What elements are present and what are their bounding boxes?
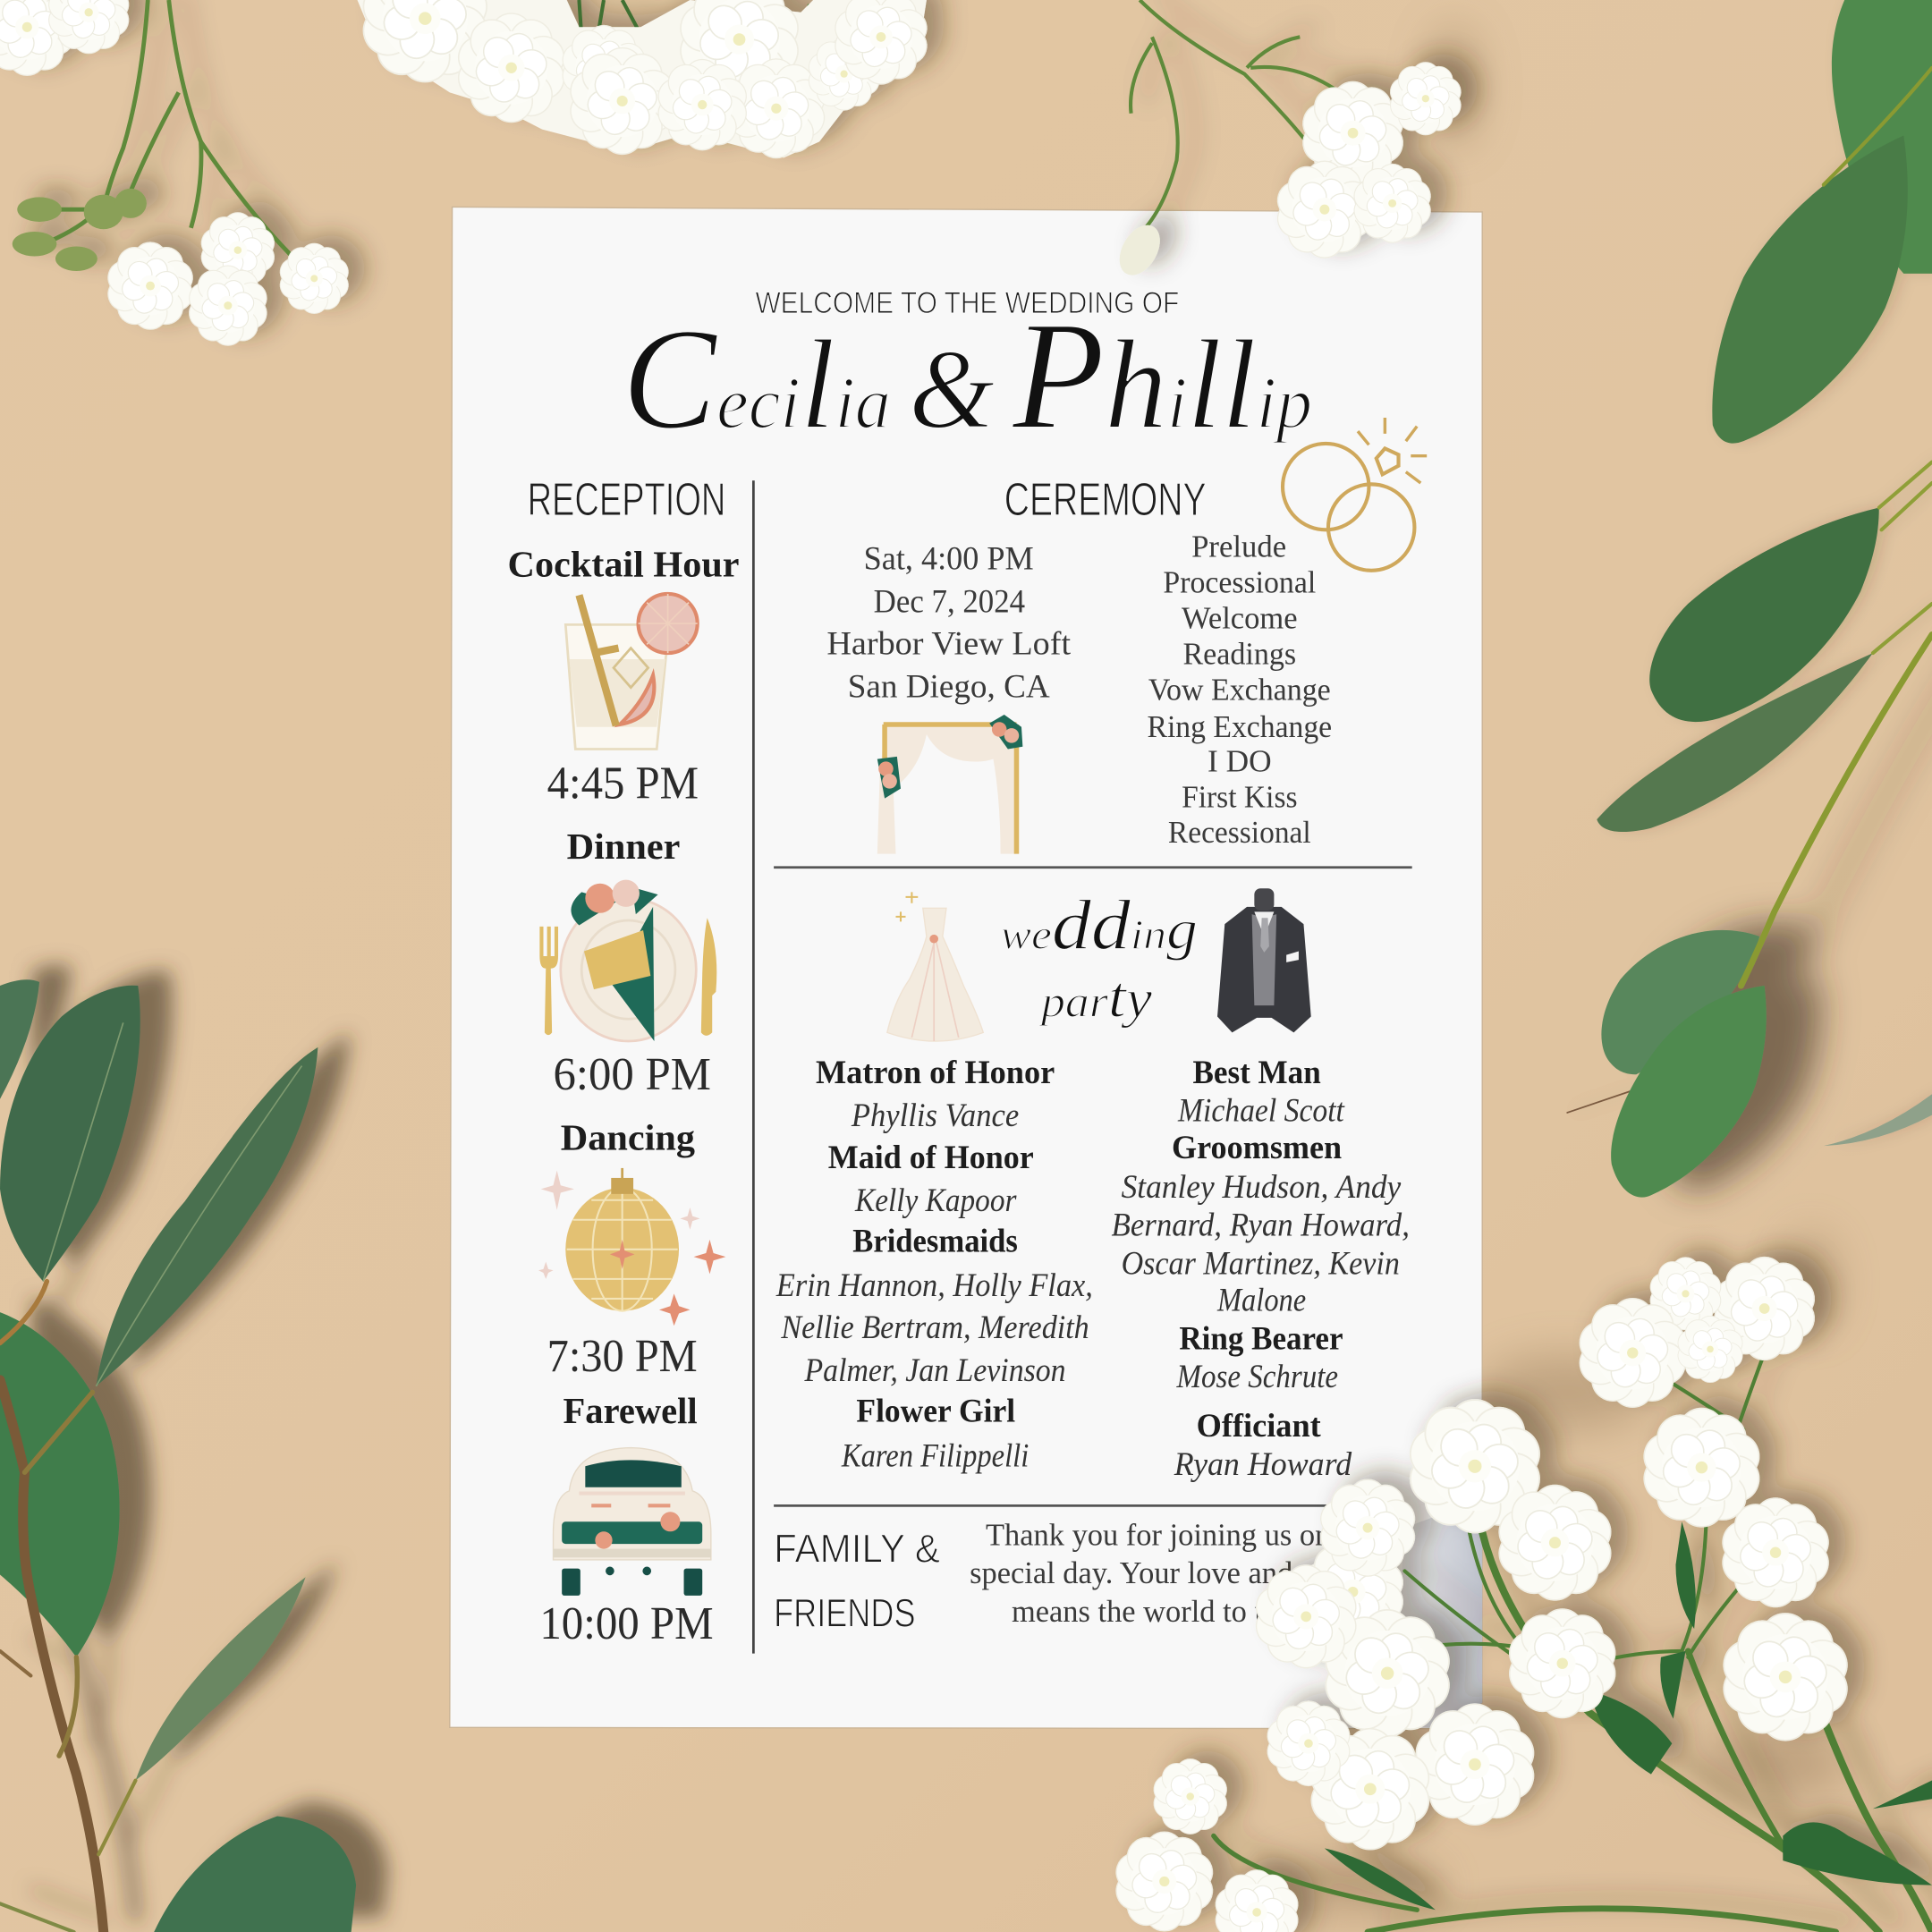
- heading: family & friends: FRIENDS: [774, 1591, 916, 1635]
- order of service: Readings: [1182, 638, 1296, 672]
- thank you message: Thank you for joining us on our: [986, 1518, 1379, 1552]
- thank you message: [970, 1518, 1393, 1629]
- event: dancing: Dancing: [561, 1116, 695, 1157]
- foliage: top-left sprig: [0, 0, 352, 347]
- right stems: [1567, 68, 1932, 1113]
- right column: groom's party: Oscar Martinez, Kevin: [1122, 1245, 1400, 1282]
- foliage: right eucalyptus: [1567, 0, 1932, 1146]
- paper card: [450, 207, 1482, 1729]
- foliage: right lower paired leaves: [1601, 634, 1932, 1198]
- panel: wedding party: [775, 886, 1410, 1483]
- order of service: Vow Exchange: [1148, 673, 1331, 707]
- right column: groom's party: Mose Schrute: [1176, 1359, 1338, 1395]
- ceremony details: Harbor View Loft: [826, 625, 1072, 662]
- bouquet stems: [1214, 1343, 1932, 1932]
- right column: groom's party: Ring Bearer: [1179, 1320, 1343, 1357]
- script heading: wedding party: party: [1038, 964, 1152, 1030]
- title: couple names: Cecilia & Phillip: [623, 289, 1312, 462]
- order of service: Ring Exchange: [1147, 710, 1332, 744]
- icon: groom suit: [1217, 888, 1311, 1032]
- sprig stems: [49, 0, 291, 255]
- order of service: [1147, 530, 1332, 850]
- ceremony details: San Diego, CA: [848, 669, 1050, 706]
- order of service: Prelude: [1191, 530, 1286, 564]
- ceremony details: [826, 540, 1072, 706]
- left column: bride's party: Matron of Honor: [816, 1055, 1055, 1091]
- time: 7:30 PM: 7:30 PM: [547, 1330, 698, 1382]
- icon: cocktail: [565, 594, 698, 750]
- icon: place setting: [539, 880, 716, 1041]
- icon: wedding arch: [877, 715, 1022, 854]
- flowers: top-center cluster: [357, 0, 931, 160]
- icon: disco ball: [538, 1168, 725, 1326]
- flowers: bottom-right bouquet: [1112, 1255, 1932, 1932]
- right column: groom's party: Officiant: [1197, 1408, 1321, 1445]
- left column: bride's party: Palmer, Jan Levinson: [804, 1352, 1066, 1389]
- icon: wedding dress: [887, 892, 983, 1041]
- eucalyptus stem: [0, 1282, 136, 1932]
- order of service: I DO: [1208, 744, 1272, 778]
- time: 10:00 PM: 10:00 PM: [539, 1597, 714, 1649]
- event: farewell: Farewell: [564, 1390, 698, 1431]
- left column: bride's party: Nellie Bertram, Meredith: [780, 1309, 1089, 1346]
- thank you message: means the world to us!: [1012, 1595, 1292, 1629]
- icon: getaway car: [554, 1448, 711, 1596]
- right column: groom's party: Groomsmen: [1172, 1130, 1342, 1166]
- thank you message: special day. Your love and support: [970, 1556, 1393, 1590]
- time: 4:45 PM: 4:45 PM: [547, 758, 699, 809]
- ceremony details: Sat, 4:00 PM: [864, 540, 1034, 577]
- heading: reception: RECEPTION: [528, 474, 725, 526]
- left column: bride's party: Bridesmaids: [852, 1224, 1018, 1260]
- top-right bud: [1111, 218, 1168, 283]
- column divider: [752, 480, 754, 1654]
- heading: ceremony: CEREMONY: [1004, 474, 1207, 526]
- right column: groom's party: Malone: [1216, 1283, 1306, 1319]
- foliage: bottom-left eucalyptus: [0, 979, 356, 1932]
- heading: family & friends: [774, 1528, 940, 1635]
- flowers: top-right spray: [1111, 0, 1464, 283]
- left column: bride's party: Kelly Kapoor: [854, 1182, 1017, 1219]
- top-left buds: [13, 189, 147, 271]
- script heading: wedding party: wedding: [1001, 886, 1198, 965]
- right column: groom's party: Ryan Howard: [1174, 1446, 1352, 1483]
- right column: groom's party: Best Man: [1192, 1055, 1321, 1091]
- order of service: Welcome: [1182, 602, 1298, 636]
- right column: groom's party: Michael Scott: [1177, 1093, 1345, 1130]
- left column: bride's party: [775, 1055, 1093, 1474]
- divider: ceremony / party: [774, 867, 1412, 869]
- left column: bride's party: Erin Hannon, Holly Flax,: [775, 1267, 1093, 1304]
- panel: family and friends: [774, 1518, 1393, 1635]
- ceremony details: Dec 7, 2024: [874, 584, 1025, 621]
- left column: bride's party: Flower Girl: [856, 1394, 1015, 1430]
- order of service: Recessional: [1168, 816, 1311, 850]
- script heading: wedding party: [1001, 886, 1198, 1030]
- divider: party / thanks: [774, 1504, 1349, 1506]
- curled paper corner: [1393, 1510, 1482, 1729]
- heading: welcome: WELCOME TO THE WEDDING OF: [755, 286, 1179, 320]
- panel: ceremony: [826, 418, 1427, 854]
- icon: rings: [1283, 418, 1427, 571]
- soft background shadows: [1269, 25, 1848, 1912]
- right column: groom's party: Bernard, Ryan Howard,: [1112, 1208, 1410, 1244]
- heading: family & friends: FAMILY &: [774, 1528, 940, 1572]
- order of service: First Kiss: [1182, 780, 1298, 814]
- bouquet leaves: [1325, 1521, 1932, 1910]
- left column: bride's party: Maid of Honor: [828, 1140, 1034, 1176]
- right column: groom's party: [1112, 1055, 1410, 1483]
- order of service: Processional: [1163, 566, 1316, 600]
- time: 6:00 PM: 6:00 PM: [554, 1048, 711, 1100]
- right column: groom's party: Stanley Hudson, Andy: [1122, 1169, 1402, 1206]
- panel: reception: [508, 474, 740, 1649]
- left column: bride's party: Karen Filippelli: [841, 1437, 1029, 1474]
- event: dinner: Dinner: [567, 826, 680, 867]
- event: cocktail hour: Cocktail Hour: [508, 544, 740, 585]
- left column: bride's party: Phyllis Vance: [851, 1097, 1019, 1134]
